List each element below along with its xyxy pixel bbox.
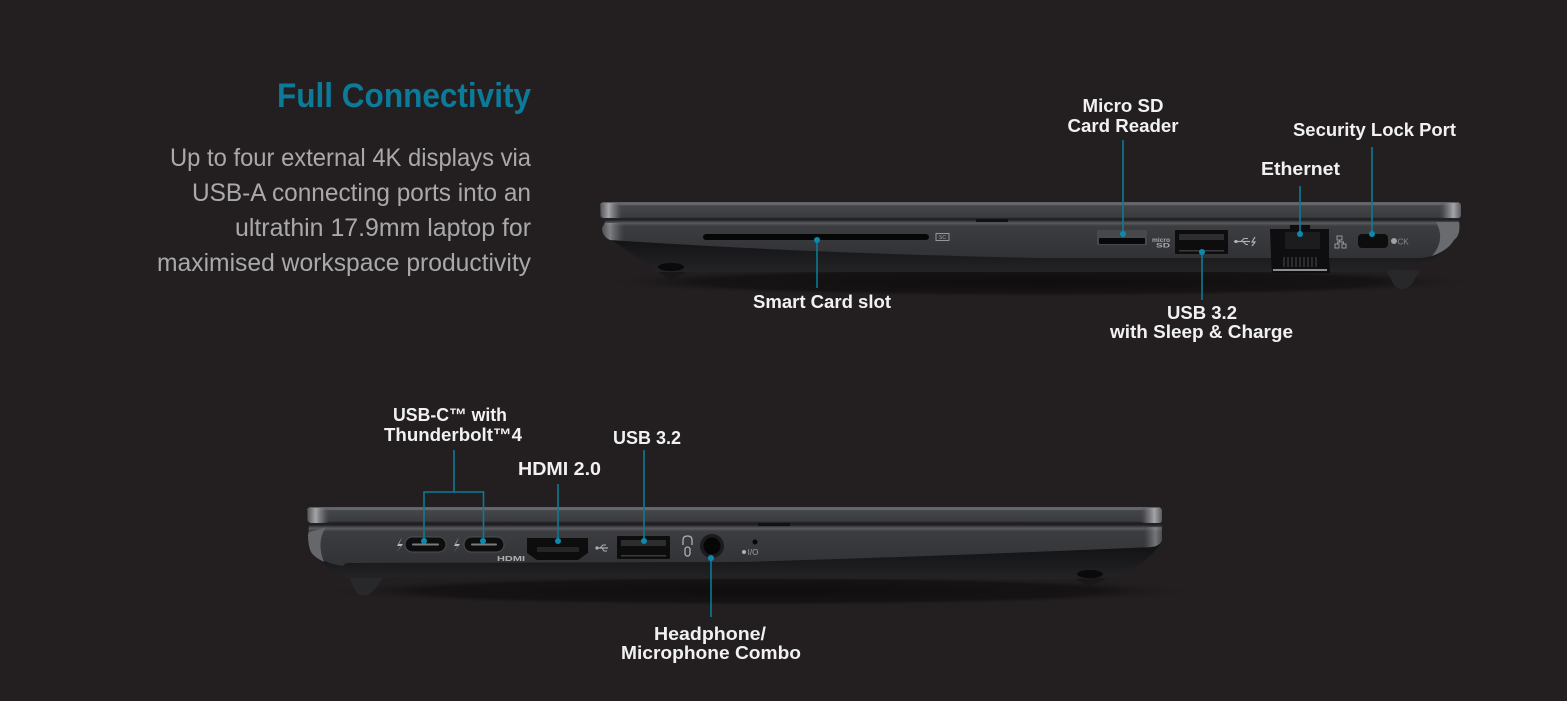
lid right highlight <box>1140 508 1162 523</box>
smart card slot <box>703 234 929 240</box>
callout: USB-C with Thunderbolt 4: Thunderbolt™4 <box>384 425 522 445</box>
hinge gap notch <box>976 219 1008 222</box>
callout: Micro SD Card Reader: Card Reader <box>1068 116 1178 136</box>
callout: USB 3.2 with Sleep and Charge: with Sleep & Charge <box>1109 322 1293 342</box>
callout: Ethernet <box>1261 159 1340 237</box>
screw hole <box>658 263 684 271</box>
USB-C port 2 <box>464 537 504 552</box>
callout: Security Lock Port <box>1293 120 1456 237</box>
callout: Headphone/Microphone Combo: Headphone/ <box>654 624 766 644</box>
laptop underside <box>310 535 1160 579</box>
callout: USB 3.2 <box>613 428 681 544</box>
laptop: left side view <box>307 507 1210 606</box>
lock icon: CK <box>1397 238 1409 246</box>
USB port <box>1175 230 1228 254</box>
lid left highlight <box>308 508 330 523</box>
headset icon <box>683 536 692 556</box>
Ethernet icon <box>1335 236 1346 248</box>
description text: Up to four external 4K displays via <box>170 144 531 172</box>
SC icon: SC <box>939 235 946 241</box>
lid left highlight <box>601 203 623 218</box>
callout: Ethernet: Ethernet <box>1261 159 1340 179</box>
callout: Micro SD Card Reader <box>1068 96 1178 237</box>
status LED <box>752 540 758 544</box>
base right highlight <box>1432 222 1459 256</box>
callout: Headphone/Microphone Combo <box>621 555 801 663</box>
SC icon <box>936 234 949 241</box>
HDMI logo: HDMI <box>497 556 525 563</box>
bolt icon 2 <box>453 537 460 553</box>
lock icon <box>1391 238 1409 246</box>
laptop base band <box>308 525 1162 566</box>
callout: Security Lock Port: Security Lock Port <box>1293 120 1456 140</box>
audio jack <box>700 534 724 558</box>
shadow <box>310 576 1210 606</box>
micro SD logo: SD <box>1156 242 1170 250</box>
description text <box>157 144 531 277</box>
rubber foot left <box>349 577 383 595</box>
micro SD logo: micro <box>1152 237 1170 244</box>
hinge gap notch <box>758 523 790 526</box>
callout: HDMI 2.0: HDMI 2.0 <box>518 459 601 479</box>
laptop base band <box>602 220 1459 258</box>
bolt icon 1 <box>396 537 403 553</box>
USB charge icon <box>1234 237 1255 246</box>
micro SD slot <box>1097 230 1147 245</box>
callout: Headphone/Microphone Combo: Microphone Combo <box>621 643 801 663</box>
USB-C port 1 <box>405 537 446 552</box>
title: Full Connectivity <box>277 77 531 115</box>
description text: USB-A connecting ports into an <box>192 179 531 207</box>
lock port <box>1358 234 1388 248</box>
callout: Smart Card slot <box>753 237 891 312</box>
laptop: right side view <box>590 202 1490 297</box>
rubber foot right <box>1073 578 1107 586</box>
power icon <box>742 548 758 557</box>
rubber foot right <box>1386 270 1420 289</box>
laptop lid <box>600 202 1461 219</box>
base right highlight <box>1143 527 1162 548</box>
description text: maximised workspace productivity <box>157 249 531 277</box>
callout: USB-C with Thunderbolt 4: USB-C™ with <box>393 405 507 425</box>
screw hole <box>1077 570 1103 578</box>
description text: ultrathin 17.9mm laptop for <box>235 214 531 242</box>
HDMI port <box>527 538 588 560</box>
base left highlight <box>308 527 326 562</box>
callout: USB 3.2 with Sleep and Charge <box>1109 249 1293 342</box>
lid right highlight <box>1439 203 1461 218</box>
USB port <box>617 536 670 559</box>
laptop underside <box>605 226 1458 272</box>
USB icon <box>595 545 608 551</box>
callout: Micro SD Card Reader: Micro SD <box>1082 96 1164 116</box>
micro SD logo <box>1152 237 1170 250</box>
Ethernet port <box>1270 225 1330 273</box>
power icon: I/O <box>748 548 758 557</box>
callout: Smart Card slot: Smart Card slot <box>753 292 891 312</box>
callout: USB 3.2 with Sleep and Charge: USB 3.2 <box>1167 303 1237 323</box>
rubber foot left <box>655 270 690 280</box>
callout: USB 3.2: USB 3.2 <box>613 428 681 448</box>
shadow <box>590 267 1490 297</box>
callout: HDMI 2.0 <box>518 459 601 544</box>
base left highlight <box>602 223 625 241</box>
callout: USB-C with Thunderbolt 4 <box>384 405 522 544</box>
laptop lid <box>307 507 1162 523</box>
